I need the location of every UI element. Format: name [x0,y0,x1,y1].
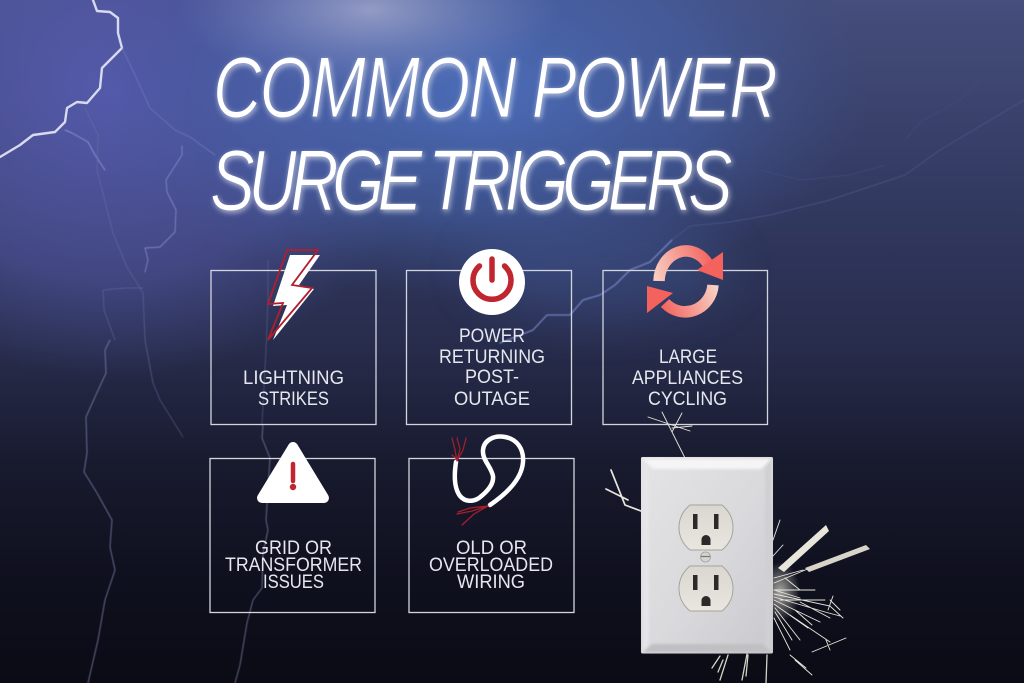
label: STRIKES [258,389,329,410]
label: TRANSFORMER [225,555,362,576]
icon: frayed wire [452,437,523,525]
screw [700,552,710,562]
label: GRID OR [255,538,332,559]
label: POST- [465,367,519,388]
receptacle: top [679,505,733,550]
label [243,368,344,410]
title: SURGE TRIGGERS [210,133,733,229]
panel: old or overloaded wiring [409,437,574,612]
label: LARGE [659,347,717,368]
label: OUTAGE [454,389,530,410]
label: WIRING [457,572,525,593]
label: OVERLOADED [429,555,553,576]
wall outlet [641,457,773,654]
title: COMMON POWER [213,40,778,136]
label: RETURNING [439,347,545,368]
title [210,40,778,229]
panel: grid or transformer issues [210,447,375,612]
icon: power button [459,249,525,315]
panel: power returning post-outage [406,249,572,424]
receptacle: bottom [679,566,733,611]
sparks [606,412,870,683]
label [439,326,545,410]
label: ISSUES [263,572,324,593]
icon: lightning bolt [268,250,320,340]
label: POWER [459,326,525,347]
panel: large appliances cycling [603,251,768,424]
label: CYCLING [648,389,727,410]
icon: cycling arrows [647,251,723,313]
label [632,347,743,410]
label [429,538,553,593]
icon: warning triangle [262,447,324,498]
label: OLD OR [456,538,527,559]
label: APPLIANCES [632,368,743,389]
label: LIGHTNING [243,368,344,389]
panel: lightning strikes [211,250,376,424]
label [225,538,362,593]
